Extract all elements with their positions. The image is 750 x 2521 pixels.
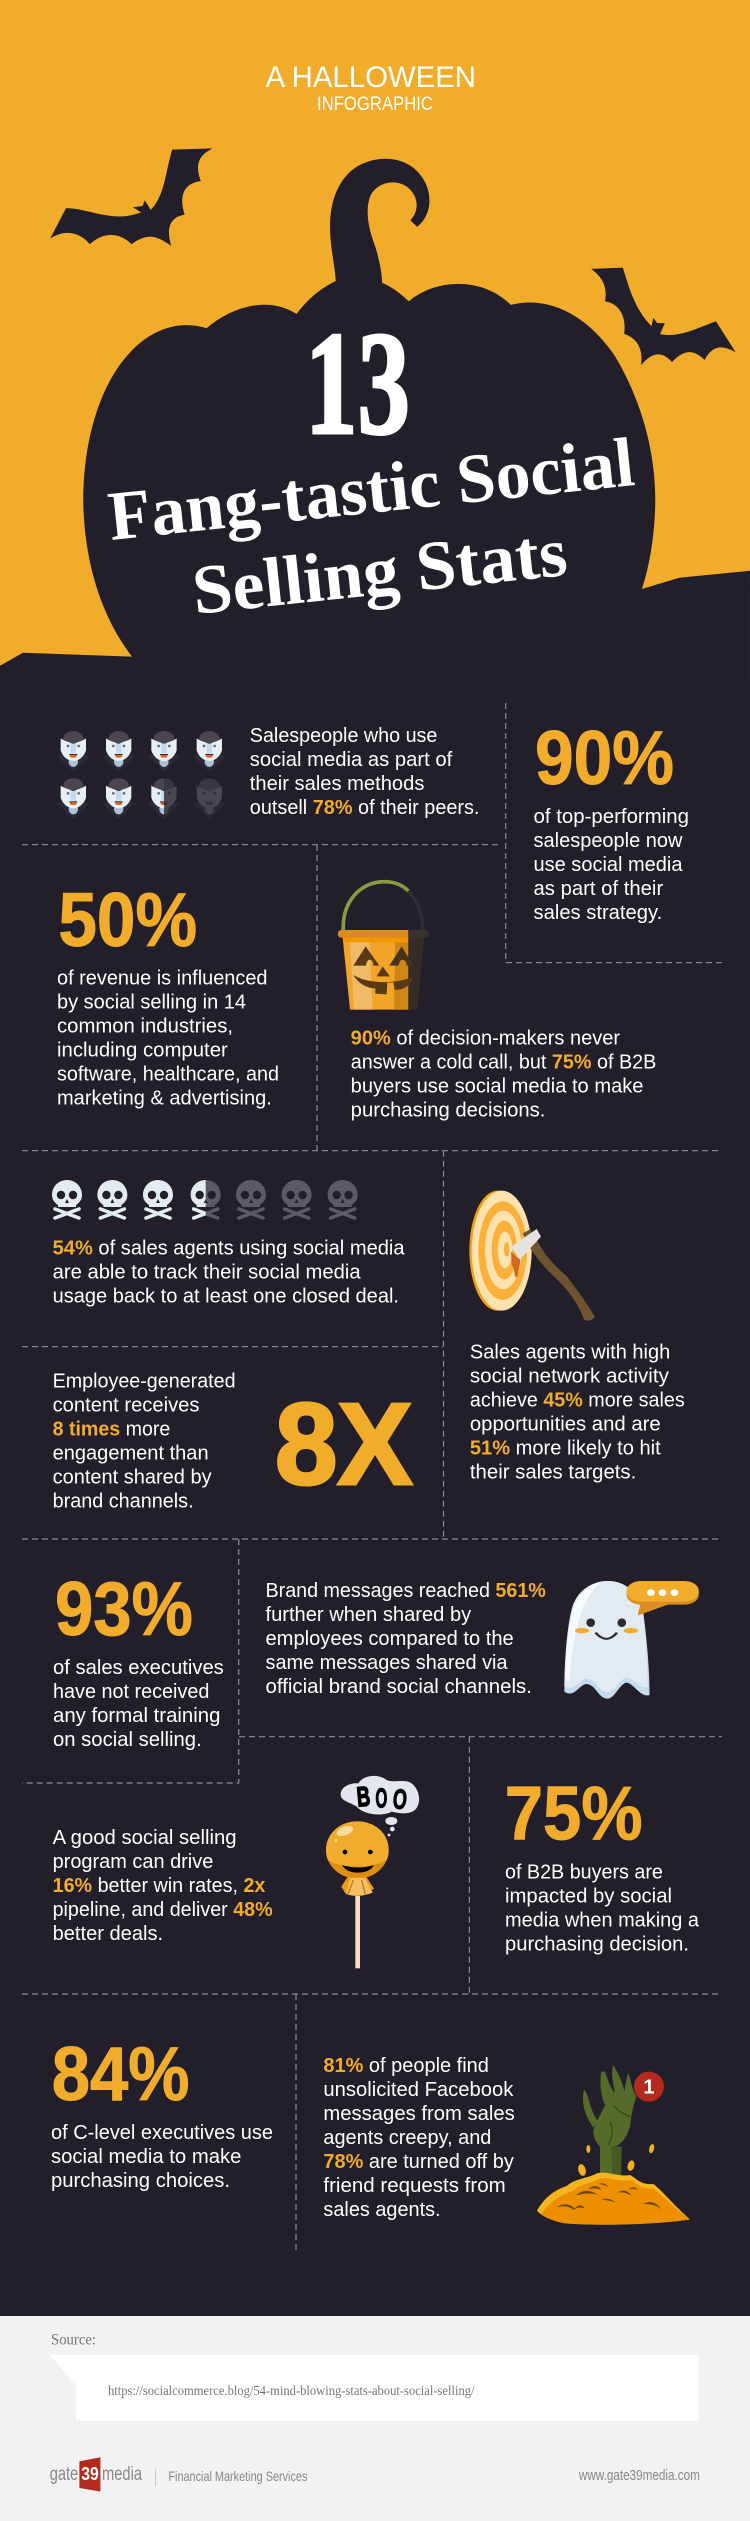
text: decision-makers: 90% of decision-makers never — [351, 1027, 620, 1049]
text: unsolicited facebook messages: friend requests from — [323, 2175, 506, 2197]
icon: right bat — [591, 268, 736, 365]
text: c-level executives — [51, 2122, 273, 2192]
text: no formal training — [53, 1657, 224, 1751]
title: 13 fang-tastic social selling stats: 13 — [305, 302, 410, 466]
text: revenue influenced — [57, 968, 279, 1110]
panel: 84% C-level executives — [51, 2032, 273, 2192]
text: no formal training: have not received — [53, 1681, 209, 1703]
source box — [50, 2355, 699, 2421]
text: brand messages reached: further when shared by — [266, 1604, 471, 1626]
stat: 75%: 75% — [505, 1771, 642, 1856]
panel: 90% top performers — [534, 716, 689, 924]
title: 13 fang-tastic social selling stats: Selling Stats — [189, 514, 571, 630]
icon: lollipop saying boo: B — [355, 1781, 371, 1813]
heading: a halloween infographic — [266, 61, 476, 115]
text: salespeople outsell peers: Salespeople who use — [250, 725, 437, 747]
text: employee-generated content: 8 times more — [53, 1419, 170, 1441]
text: decision-makers: buyers use social media to make — [351, 1075, 644, 1097]
text: unsolicited facebook messages — [323, 2055, 515, 2221]
text: c-level executives: of C-level executives use — [51, 2122, 273, 2144]
panel: skulls 54% — [52, 1180, 405, 1308]
stat: 8X: 8X — [275, 1379, 412, 1509]
text: impacted by social media: media when making a — [505, 1910, 700, 1932]
text: high social network activity: social network activity — [470, 1365, 669, 1387]
source label: Source: — [51, 2332, 96, 2349]
panel: brand messages — [266, 1580, 699, 1699]
panel: target and axe — [469, 1191, 685, 1483]
text: top-performing salespeople: sales strategy. — [534, 902, 662, 924]
text: impacted by social media — [505, 1862, 700, 1956]
text: revenue influenced: of revenue is influenced — [57, 968, 268, 990]
panel: vampires 78% — [57, 725, 479, 819]
text: win rates: A good social selling — [53, 1827, 237, 1849]
text: win rates: program can drive — [53, 1851, 213, 1873]
text: decision-makers: purchasing decisions. — [351, 1099, 545, 1121]
icon: skull pictogram row — [52, 1180, 358, 1218]
panel: 50% of revenue — [57, 878, 279, 1110]
stat: 93%: 93% — [55, 1567, 193, 1652]
footer: gate39media logo: media — [102, 2464, 142, 2485]
footer: gate39media logo — [50, 2457, 307, 2492]
text: high social network activity: Sales agents with high — [470, 1341, 670, 1363]
text: brand messages reached: Brand messages reached 561% — [266, 1580, 546, 1602]
text: top-performing salespeople — [534, 806, 689, 924]
text: c-level executives: social media to make — [51, 2146, 241, 2168]
text: revenue influenced: by social selling in 14 — [57, 992, 246, 1014]
text: no formal training: of sales executives — [53, 1657, 224, 1679]
text: revenue influenced: common industries, — [57, 1016, 233, 1038]
text: impacted by social media: impacted by social — [505, 1886, 672, 1908]
text: sales agents track: are able to track their social media — [53, 1262, 361, 1284]
panel: 75% B2B buyers — [505, 1771, 700, 1956]
text: employee-generated content: brand channels. — [53, 1491, 194, 1513]
text: top-performing salespeople: of top-performing — [534, 806, 689, 828]
text: salespeople outsell peers — [250, 725, 480, 819]
text: brand messages reached — [266, 1580, 546, 1698]
text: employee-generated content — [53, 1371, 236, 1513]
text: employee-generated content: engagement than — [53, 1443, 209, 1465]
icon: target with axe — [469, 1191, 595, 1321]
footer: source — [50, 2332, 699, 2421]
text: unsolicited facebook messages: 78% are turned off by — [323, 2151, 514, 2173]
text: win rates — [53, 1827, 273, 1945]
icon: zombie hand with notification: 1 — [643, 2077, 655, 2099]
text: unsolicited facebook messages: sales agents. — [323, 2199, 441, 2221]
text: unsolicited facebook messages: messages from sales — [323, 2103, 515, 2125]
text: sales agents track: 54% of sales agents using social media — [53, 1238, 405, 1260]
text: brand messages reached: official brand social channels. — [266, 1676, 532, 1698]
text: unsolicited facebook messages: unsolicited Facebook — [323, 2079, 514, 2101]
stat: 90%: 90% — [535, 716, 674, 801]
icon: lollipop saying boo — [326, 1776, 419, 1968]
text: salespeople outsell peers: social media as part of — [250, 749, 453, 771]
text: high social network activity: opportunities and are — [470, 1413, 661, 1435]
text: no formal training: any formal training — [53, 1705, 220, 1727]
text: no formal training: on social selling. — [53, 1729, 202, 1751]
text: impacted by social media: purchasing decision. — [505, 1934, 689, 1956]
text: employee-generated content: content receives — [53, 1395, 199, 1417]
heading: a halloween infographic: A HALLOWEEN — [266, 61, 476, 94]
stat: 84%: 84% — [52, 2032, 190, 2117]
footer: gate39media logo: gate — [50, 2464, 78, 2485]
text: decision-makers — [351, 1027, 656, 1121]
text: brand messages reached: employees compared to the — [266, 1628, 514, 1650]
text: revenue influenced: marketing & advertising. — [57, 1088, 272, 1110]
text: win rates: 16% better win rates, 2x — [53, 1875, 265, 1897]
text: top-performing salespeople: salespeople now — [534, 830, 683, 852]
icon: left bat — [50, 148, 213, 246]
text: c-level executives: purchasing choices. — [51, 2170, 230, 2192]
source box: https://socialcommerce.blog/54-mind-blowing-stats-about-social-selling/ — [108, 2384, 475, 2399]
title: 13 fang-tastic social selling stats: Fang-tastic Social — [105, 424, 638, 556]
text: unsolicited facebook messages: agents creepy, and — [323, 2127, 491, 2149]
text: sales agents track: usage back to at least one closed deal. — [53, 1286, 399, 1308]
icon: jack-o-lantern bucket — [338, 882, 429, 1010]
icon: lollipop saying boo: O — [391, 1783, 409, 1815]
text: unsolicited facebook messages: 81% of people find — [323, 2055, 489, 2077]
text: salespeople outsell peers: their sales methods — [250, 773, 424, 795]
text: salespeople outsell peers: outsell 78% of their peers. — [250, 797, 480, 819]
pumpkin silhouette and ground — [0, 159, 750, 685]
text: high social network activity — [470, 1341, 685, 1483]
icon: lollipop saying boo: O — [375, 1782, 387, 1813]
text: employee-generated content: Employee-generated — [53, 1371, 236, 1393]
text: high social network activity: their sales targets. — [470, 1461, 636, 1483]
panel: 8X engagement — [53, 1371, 412, 1513]
text: decision-makers: answer a cold call, but 75% of B2B — [351, 1051, 656, 1073]
footer: website: www.gate39media.com — [578, 2468, 700, 2484]
panel: unsolicited messages — [323, 2055, 690, 2225]
panel: good social selling program — [53, 1776, 419, 1968]
footer: gate39media logo: 39 — [81, 2464, 99, 2484]
title: 13 fang-tastic social selling stats — [105, 302, 638, 630]
text: revenue influenced: software, healthcare, and — [57, 1064, 279, 1086]
panel: 93% sales executives — [53, 1567, 224, 1751]
text: brand messages reached: same messages shared via — [266, 1652, 508, 1674]
text: employee-generated content: content shared by — [53, 1467, 212, 1489]
text: top-performing salespeople: as part of their — [534, 878, 664, 900]
heading: a halloween infographic: INFOGRAPHIC — [317, 94, 433, 115]
text: revenue influenced: including computer — [57, 1040, 228, 1062]
text: high social network activity: 51% more likely to hit — [470, 1437, 661, 1459]
dashed panel dividers — [22, 703, 722, 2252]
icon: zombie hand with notification — [537, 2065, 690, 2225]
text: win rates: better deals. — [53, 1923, 163, 1945]
text: impacted by social media: of B2B buyers are — [505, 1862, 663, 1884]
icon: ghost with speech bubble — [564, 1581, 699, 1699]
footer: gate39media logo: Financial Marketing Services — [168, 2468, 307, 2484]
stat: 50%: 50% — [58, 878, 197, 963]
text: top-performing salespeople: use social media — [534, 854, 683, 876]
text: high social network activity: achieve 45% more sales — [470, 1389, 685, 1411]
text: sales agents track — [53, 1238, 405, 1308]
icon: vampire pictogram row — [57, 731, 226, 819]
panel: cold call — [338, 882, 656, 1121]
text: win rates: pipeline, and deliver 48% — [53, 1899, 273, 1921]
